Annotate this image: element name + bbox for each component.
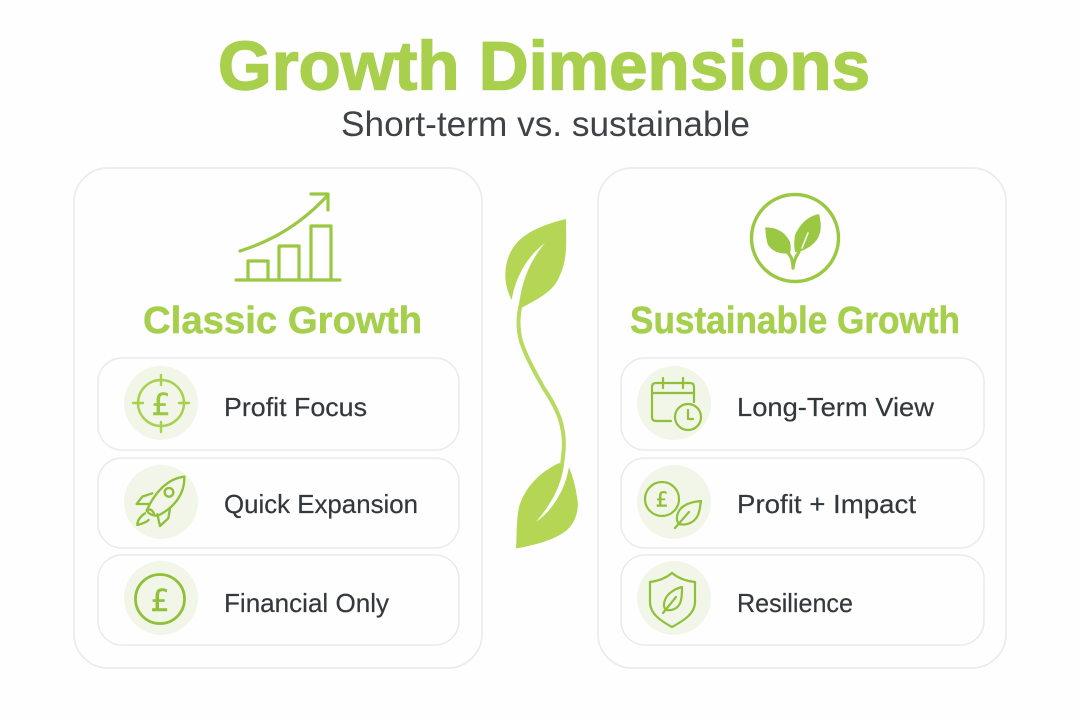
heading: classic growth: Classic Growth <box>143 300 422 342</box>
icon: pound coin and leaf <box>645 482 701 528</box>
panel: classic growth <box>74 168 482 668</box>
icon: pound coin: £ <box>150 584 170 619</box>
icon: pound target <box>133 375 189 432</box>
illustration: vine with leaves <box>505 219 578 548</box>
label: Long-Term View <box>737 392 934 422</box>
icon: pound coin <box>136 574 184 624</box>
icon: pound target: £ <box>151 388 171 423</box>
label: Financial Only <box>224 588 389 618</box>
label: Profit + Impact <box>737 489 917 519</box>
row: profit focus <box>98 358 459 450</box>
icon: pound coin and leaf: £ <box>656 488 668 512</box>
icon: rocket <box>137 477 184 526</box>
row: long-term view <box>621 358 984 450</box>
panel: sustainable growth <box>598 168 1006 668</box>
row: resilience <box>621 555 984 645</box>
icon: rising bar chart <box>236 194 340 280</box>
heading: sustainable growth: Sustainable Growth <box>630 300 960 342</box>
icon: sprout in circle <box>752 194 838 282</box>
row: quick expansion <box>98 458 459 548</box>
row: profit + impact <box>621 458 984 548</box>
subtitle: Short-term vs. sustainable <box>341 105 750 144</box>
title: Growth Dimensions <box>218 28 870 104</box>
label: Resilience <box>737 588 853 618</box>
icon: calendar and clock <box>652 378 701 430</box>
label: Quick Expansion <box>224 489 418 519</box>
label: Profit Focus <box>224 392 367 422</box>
icon: shield with leaf <box>650 573 695 627</box>
row: financial only <box>98 555 459 645</box>
